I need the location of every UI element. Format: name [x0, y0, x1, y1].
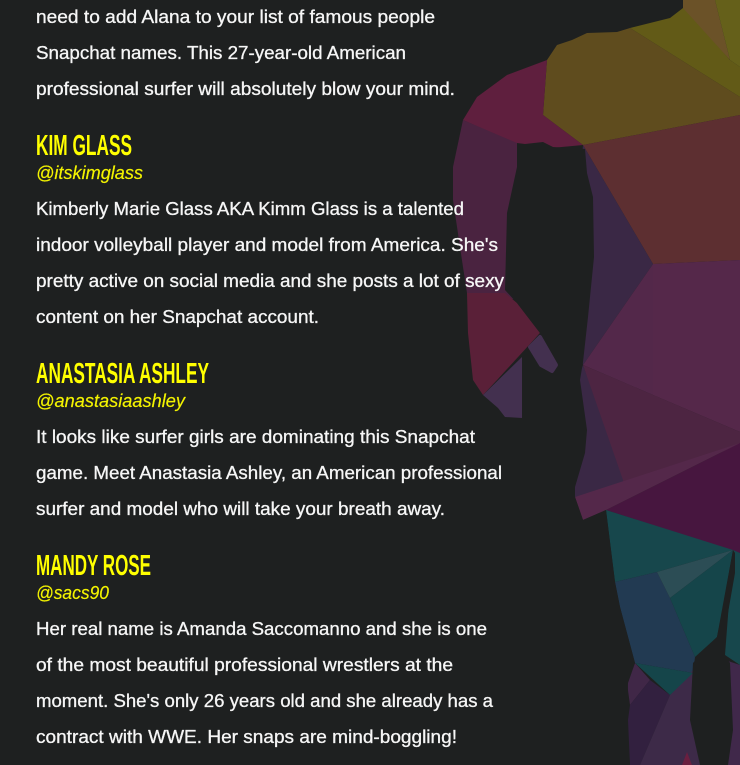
section: Kim Glass: [36, 130, 504, 327]
text: Kim Glass description: indoor volleyball player and model from America. She's: [36, 235, 498, 255]
text: Anastasia Ashley description: game. Meet Anastasia Ashley, an American professional: [36, 463, 502, 483]
text: Mandy Rose description: [36, 619, 494, 747]
negative space between arm, torso and legs: [500, 142, 635, 765]
text: Mandy Rose description: Her real name is Amanda Saccomanno and she is one: [36, 619, 487, 639]
thumb: [530, 337, 556, 371]
text: Anastasia Ashley description: [36, 427, 502, 519]
handle: sacs90: @sacs90: [36, 583, 109, 603]
heading: Mandy Rose: MANDY ROSE: [36, 550, 151, 582]
text: Kim Glass description: content on her Snapchat account.: [36, 307, 319, 327]
heading: Anastasia Ashley: ANASTASIA ASHLEY: [36, 358, 209, 390]
text: Kim Glass description: Kimberly Marie Glass AKA Kimm Glass is a talented: [36, 199, 464, 219]
intro text block: professional surfer will absolutely blow your mind.: [36, 79, 455, 99]
handle: itskimglass: @itskimglass: [36, 163, 143, 183]
heading: Kim Glass: KIM GLASS: [36, 130, 132, 162]
section: Mandy Rose: [36, 550, 494, 747]
text: Anastasia Ashley description: surfer and model who will take your breath away.: [36, 499, 445, 519]
text: Kim Glass description: pretty active on social media and she posts a lot of sexy: [36, 271, 504, 291]
text: Mandy Rose description: moment. She's only 26 years old and she already has a: [36, 691, 494, 711]
low-poly silhouette figure: [453, 0, 740, 765]
handle: anastasiaashley: @anastasiaashley: [36, 391, 186, 411]
text: Kim Glass description: [36, 199, 504, 327]
text: Mandy Rose description: of the most beautiful professional wrestlers at the: [36, 655, 453, 675]
text: Anastasia Ashley description: It looks like surfer girls are dominating this Snapchat: [36, 427, 475, 447]
text: Mandy Rose description: contract with WWE. Her snaps are mind-boggling!: [36, 727, 457, 747]
intro text block: need to add Alana to your list of famous people: [36, 7, 435, 27]
intro text block: [36, 7, 455, 99]
hand: [483, 357, 522, 418]
section: Anastasia Ashley: [36, 358, 502, 519]
intro text block: Snapchat names. This 27-year-old American: [36, 43, 406, 63]
